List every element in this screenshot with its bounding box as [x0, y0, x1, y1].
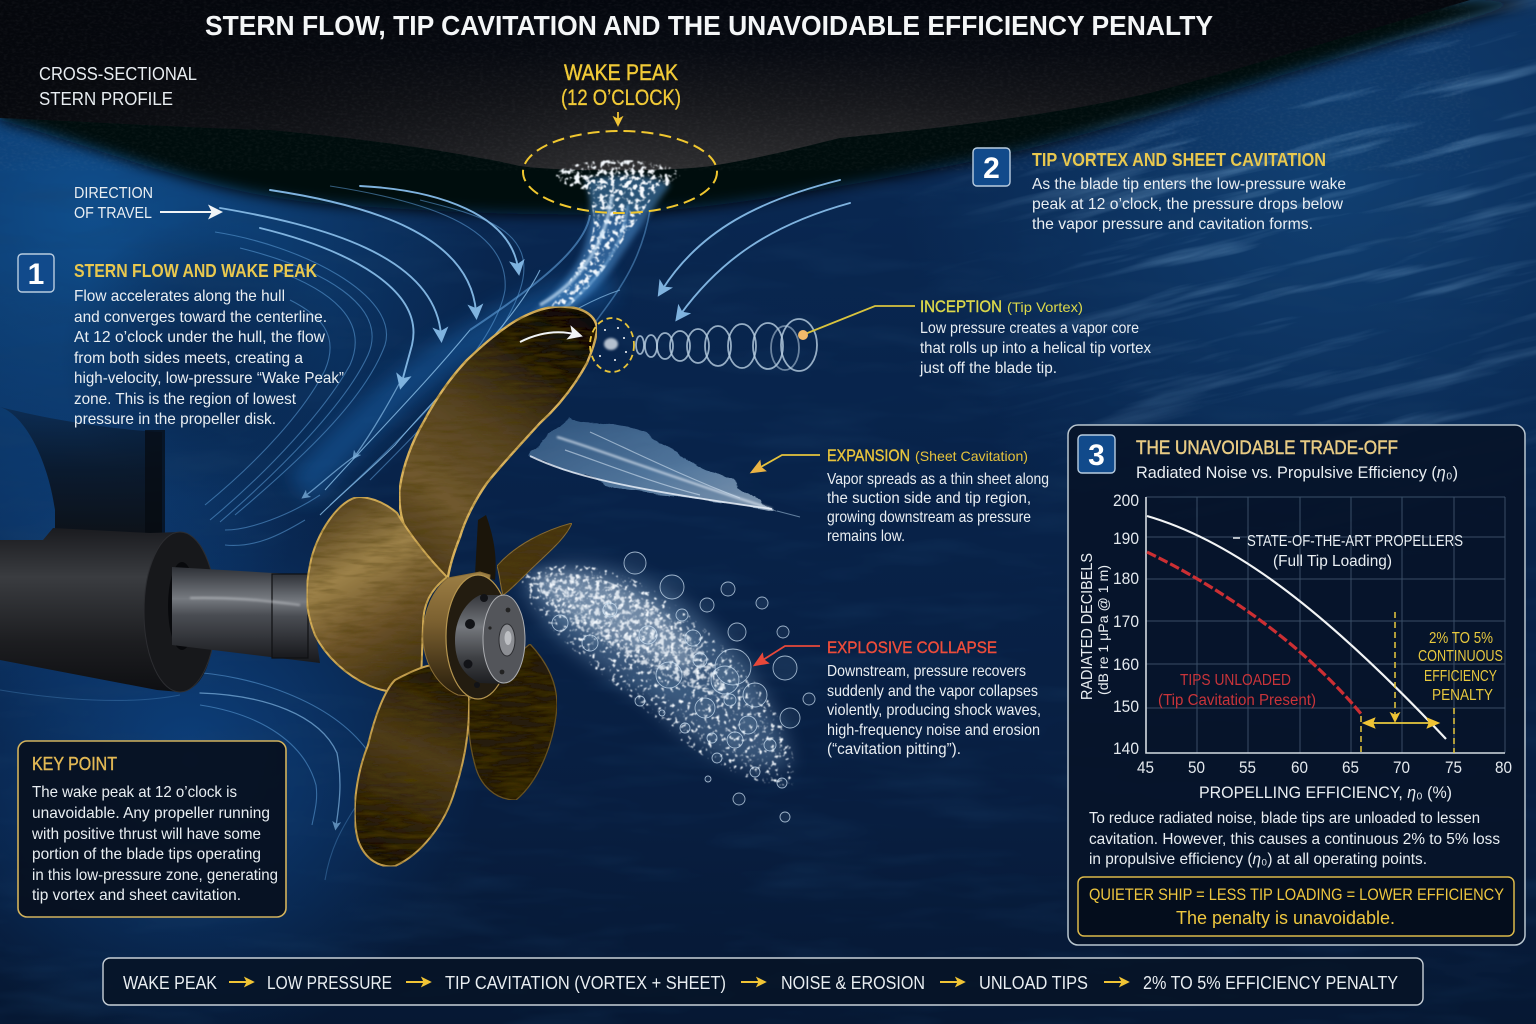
wake peak label: WAKE PEAK — [564, 60, 678, 85]
section 2: tip vortex and sheet cavitation — [973, 148, 1346, 233]
x axis ticks: 70 — [1393, 758, 1410, 777]
y axis ticks: 150 — [1113, 697, 1139, 716]
conclusion box — [1078, 877, 1514, 936]
panel heading: THE UNAVOIDABLE TRADE-OFF — [1136, 438, 1398, 459]
panel explanation text: To reduce radiated noise, blade tips are unloaded to lessen — [1089, 810, 1480, 827]
badge 2: 2 — [983, 152, 1000, 185]
bottom causal chain strip — [103, 958, 1423, 1005]
blade: rear lower — [469, 644, 557, 800]
callout: explosive collapse: high-frequency noise and erosion — [827, 722, 1040, 739]
series label: state of the art: (Full Tip Loading) — [1273, 553, 1392, 570]
y axis ticks: 170 — [1113, 612, 1139, 631]
direction of travel: OF TRAVEL — [74, 205, 152, 222]
hull cross-section — [0, 0, 1536, 215]
body 1: high-velocity, low-pressure “Wake Peak” — [74, 370, 344, 387]
y axis title: RADIATED DECIBELS — [1079, 553, 1096, 700]
bottom causal chain strip: WAKE PEAK — [123, 972, 218, 993]
bottom causal chain strip: UNLOAD TIPS — [979, 972, 1088, 993]
curve: tips unloaded — [1147, 552, 1362, 715]
panel explanation text: cavitation. However, this causes a continuous 2% to 5% loss — [1089, 831, 1500, 848]
callout: inception: just off the blade tip. — [919, 360, 1057, 377]
x axis ticks: 45 — [1137, 758, 1154, 777]
panel explanation text — [1089, 810, 1500, 868]
callout: explosive collapse — [755, 638, 1041, 758]
x axis ticks: 60 — [1291, 758, 1308, 777]
blade: bottom — [355, 665, 469, 866]
panel: the unavoidable trade-off — [1068, 425, 1525, 945]
rudder and stern tube housing — [0, 407, 320, 692]
body 1 — [74, 288, 344, 428]
x axis ticks: 55 — [1239, 758, 1256, 777]
penalty label: PENALTY — [1432, 687, 1493, 704]
body 1: zone. This is the region of lowest — [74, 391, 297, 408]
series label: state of the art — [1233, 533, 1463, 570]
key point body — [31, 784, 278, 904]
wake peak label — [561, 60, 681, 125]
series label: tips unloaded: TIPS UNLOADED — [1180, 672, 1291, 689]
panel subtitle: Radiated Noise vs. Propulsive Efficiency (η₀) — [1136, 463, 1458, 482]
line chart — [1079, 491, 1512, 802]
callout: explosive collapse: (“cavitation pitting”). — [827, 741, 961, 758]
panel: key point — [18, 741, 286, 917]
callout: expansion — [752, 446, 1049, 545]
callout: explosive collapse: violently, producing shock waves, — [827, 702, 1041, 719]
blade: rear upper — [475, 515, 572, 595]
y axis ticks — [1113, 491, 1139, 758]
penalty label — [1418, 630, 1503, 704]
body 1: Flow accelerates along the hull — [74, 288, 285, 305]
penalty bracket and arrows — [1361, 612, 1454, 753]
badge 1: 1 — [28, 258, 44, 291]
key point body: with positive thrust will have some — [31, 826, 261, 843]
callout: inception — [798, 297, 1151, 377]
blade: top — [399, 307, 597, 577]
x axis ticks — [1137, 758, 1512, 777]
body 2 — [1032, 176, 1346, 233]
body 1: and converges toward the centerline. — [74, 309, 327, 326]
section 1: stern flow and wake peak — [18, 254, 344, 428]
bottom causal chain strip: LOW PRESSURE — [267, 972, 392, 993]
body 2: As the blade tip enters the low-pressure wake — [1032, 176, 1346, 193]
tip cavitation dashed circle — [590, 318, 634, 372]
series label: state of the art: STATE-OF-THE-ART PROPELLERS — [1247, 533, 1463, 550]
wake peak dashed ellipse — [523, 131, 717, 213]
badge 1 — [18, 254, 54, 292]
badge 3 — [1078, 435, 1115, 473]
penalty label: EFFICIENCY — [1424, 668, 1497, 685]
callout: expansion: the suction side and tip region, — [827, 490, 1031, 507]
flow streamlines — [0, 180, 850, 880]
label: cross-sectional stern profile: STERN PROFILE — [39, 89, 173, 109]
direction of travel — [74, 185, 218, 222]
callout: inception: that rolls up into a helical tip vortex — [920, 340, 1151, 357]
blade: left — [307, 497, 447, 692]
series label: tips unloaded — [1158, 672, 1316, 709]
heading 2: TIP VORTEX AND SHEET CAVITATION — [1032, 150, 1326, 170]
bottom causal chain strip: TIP CAVITATION (VORTEX + SHEET) — [445, 972, 726, 993]
body 2: the vapor pressure and cavitation forms. — [1032, 216, 1313, 233]
y axis ticks: 200 — [1113, 491, 1139, 510]
callout: explosive collapse: EXPLOSIVE COLLAPSE — [827, 638, 997, 657]
callout: expansion: EXPANSION — [827, 446, 910, 465]
y axis title — [1079, 553, 1111, 700]
y axis ticks: 190 — [1113, 529, 1139, 548]
badge 2 — [973, 148, 1010, 186]
y axis ticks: 140 — [1113, 739, 1139, 758]
hub collar — [423, 572, 490, 697]
y axis title: (dB re 1 μPa @ 1 m) — [1095, 565, 1111, 695]
y axis ticks: 160 — [1113, 655, 1139, 674]
body 2: peak at 12 o’clock, the pressure drops below — [1032, 196, 1343, 213]
key point body: unavoidable. Any propeller running — [32, 805, 270, 822]
curve: state of the art — [1147, 516, 1446, 739]
penalty label: 2% TO 5% — [1429, 630, 1493, 647]
callout: explosive collapse: Downstream, pressure recovers — [827, 663, 1026, 680]
x axis title: PROPELLING EFFICIENCY, η₀ (%) — [1199, 783, 1452, 802]
helical tip vortex — [636, 319, 817, 371]
key point body: tip vortex and sheet cavitation. — [32, 887, 241, 904]
wake peak label: (12 O’CLOCK) — [561, 85, 681, 110]
key point body: in this low-pressure zone, generating — [32, 867, 278, 884]
series label: tips unloaded: (Tip Cavitation Present) — [1158, 692, 1316, 709]
sheet cavitation — [528, 417, 800, 517]
heading 1: STERN FLOW AND WAKE PEAK — [74, 261, 317, 281]
body 1: pressure in the propeller disk. — [74, 411, 276, 428]
callout: inception: (Tip Vortex) — [1007, 299, 1083, 315]
title: STERN FLOW, TIP CAVITATION AND THE UNAVOIDABLE EFFICIENCY PENALTY — [205, 10, 1213, 41]
body 1: At 12 o’clock under the hull, the flow — [74, 329, 325, 346]
conclusion box: The penalty is unavoidable. — [1176, 907, 1395, 928]
key point body: portion of the blade tips operating — [32, 846, 261, 863]
direction of travel: DIRECTION — [74, 185, 153, 202]
x axis ticks: 50 — [1188, 758, 1205, 777]
callout: inception: Low pressure creates a vapor core — [920, 320, 1139, 337]
cavitation bubble plume — [522, 552, 815, 822]
callout: explosive collapse: suddenly and the vapor collapses — [827, 683, 1038, 700]
penalty label: CONTINUOUS — [1418, 648, 1503, 665]
x axis ticks: 80 — [1495, 758, 1512, 777]
x axis ticks: 65 — [1342, 758, 1359, 777]
callout: expansion: (Sheet Cavitation) — [915, 448, 1028, 464]
label: cross-sectional stern profile: CROSS-SECTIONAL — [39, 64, 197, 84]
callout: expansion: remains low. — [827, 528, 905, 545]
key point body: The wake peak at 12 o’clock is — [32, 784, 237, 801]
callout: inception: INCEPTION — [920, 297, 1002, 316]
bottom causal chain strip: 2% TO 5% EFFICIENCY PENALTY — [1143, 972, 1398, 993]
callout: expansion: growing downstream as pressure — [827, 509, 1031, 526]
propeller — [307, 307, 597, 866]
y axis ticks: 180 — [1113, 569, 1139, 588]
bottom causal chain strip: NOISE & EROSION — [781, 972, 925, 993]
badge 3: 3 — [1088, 439, 1105, 472]
label: cross-sectional stern profile — [39, 64, 197, 109]
wake peak swirl — [470, 160, 680, 350]
panel explanation text: in propulsive efficiency (η₀) at all operating points. — [1089, 851, 1427, 868]
callout: expansion: Vapor spreads as a thin sheet along — [827, 471, 1049, 488]
body 1: from both sides meets, creating a — [74, 350, 303, 367]
x axis ticks: 75 — [1445, 758, 1462, 777]
key point heading: KEY POINT — [32, 754, 117, 774]
white rotation arrow on blade tip — [520, 332, 578, 342]
steel hub cap — [446, 575, 525, 699]
